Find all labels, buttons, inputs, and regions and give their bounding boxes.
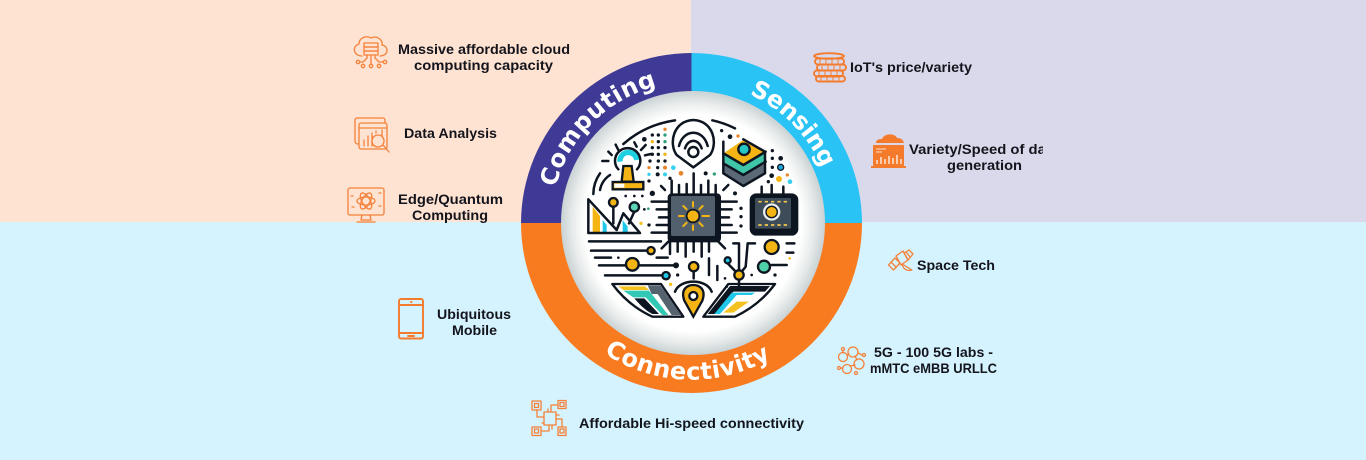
item: space tech (888, 250, 995, 273)
ring segment: connectivity (521, 223, 862, 393)
text: 5G - 100 5G labs - (874, 344, 993, 360)
text: mMTC eMBB URLLC (870, 360, 997, 376)
icon: data window with magnifier (355, 118, 389, 152)
bottom right swoosh (703, 284, 775, 317)
text: Variety/Speed of data (909, 141, 1059, 157)
text: Computing (412, 207, 488, 223)
text (398, 191, 503, 223)
text (909, 144, 1043, 173)
icon: satellite (888, 250, 913, 270)
text (398, 41, 570, 73)
text: Data Analysis (404, 125, 497, 141)
item: 5G labs (838, 344, 997, 376)
circuit traces bottom left (589, 241, 679, 279)
icon: mobile phone (399, 299, 423, 338)
location pin (675, 262, 712, 317)
text: Massive affordable cloud (398, 41, 570, 57)
icon: coin stack (814, 53, 846, 82)
icon: monitor with atom (348, 188, 384, 222)
icon: chip network (532, 400, 566, 436)
central technology emblem (588, 120, 798, 317)
bottom left swoosh (612, 284, 683, 317)
node connectors bottom right (709, 240, 794, 286)
ring label: Computing: Computing (541, 74, 655, 184)
background: light blue band (0, 222, 1366, 460)
right processor chip (750, 185, 798, 236)
text: Affordable Hi-speed connectivity (579, 415, 804, 431)
scattered dots (617, 128, 792, 288)
item: iot price (814, 53, 972, 82)
ring label: Sensing: Sensing (752, 80, 833, 166)
text: IoT's price/variety (850, 59, 972, 75)
inner disc (561, 91, 825, 355)
text (437, 306, 511, 338)
ring segment: computing (521, 53, 692, 223)
icon: laptop with cloud (871, 134, 906, 168)
text: Mobile (452, 322, 497, 338)
stamp antenna icon (613, 148, 643, 189)
text (870, 344, 997, 376)
ring segment: sensing (692, 53, 862, 223)
item: edge quantum computing (348, 188, 503, 223)
text: generation (947, 157, 1022, 173)
layered cube icon (723, 139, 766, 186)
text: Space Tech (917, 257, 995, 273)
item: ubiquitous mobile (399, 299, 511, 338)
wifi shield icon (673, 120, 714, 167)
text: Ubiquitous (437, 306, 511, 322)
central processor chip (652, 173, 737, 257)
item: hi-speed connectivity (532, 400, 804, 436)
outer circuit arcs (593, 120, 735, 194)
item: data analysis (355, 118, 497, 152)
item: cloud computing (354, 37, 570, 73)
icon: cloud server (354, 37, 387, 68)
triangle bar chart icon (588, 198, 640, 233)
text: Edge/Quantum (398, 191, 503, 207)
item: data generation (871, 134, 1059, 173)
text: computing capacity (414, 57, 553, 73)
background: peach quadrant (0, 0, 692, 222)
background: lavender quadrant (691, 0, 1366, 222)
icon: connected people nodes (838, 347, 866, 374)
ring label: Connectivity: Connectivity (608, 342, 766, 380)
